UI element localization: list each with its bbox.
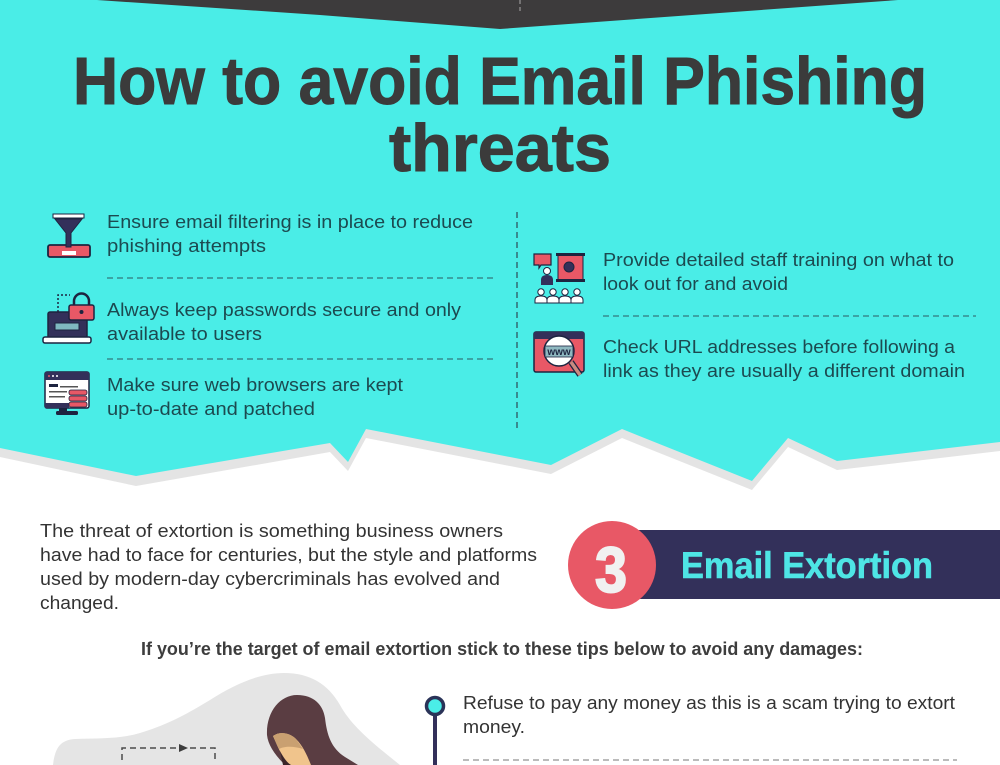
tip text: email filtering — [107, 211, 473, 256]
tip text: staff training — [603, 249, 954, 294]
tip text: URL check: Check URL addresses before following a — [603, 336, 956, 357]
tip text: browsers: Make sure web browsers are kept — [107, 374, 403, 395]
tip timeline: refuse to pay: money. — [463, 716, 525, 737]
icon: staff training — [534, 253, 585, 303]
icon: URL magnifier: www — [546, 347, 571, 358]
tip text: browsers — [107, 374, 403, 419]
section banner: 3 Email Extortion — [568, 521, 1000, 609]
section banner: 3 Email Extortion: Email Extortion — [681, 545, 933, 586]
intro paragraph: The threat of extortion is something business owners — [40, 520, 503, 541]
icon: browser window with code — [45, 372, 89, 415]
tip text: passwords: Always keep passwords secure and only — [107, 299, 462, 320]
icon: laptop with padlock — [43, 294, 94, 343]
title — [73, 44, 927, 186]
intro paragraph: changed. — [40, 592, 119, 613]
top dark header strip — [97, 0, 898, 29]
tip text: URL check: link as they are usually a different domain — [603, 360, 965, 381]
subheading: If you’re the target of email extortion stick to these tips below to avoid any damages: — [141, 639, 863, 659]
tip text: staff training: Provide detailed staff training on what to — [603, 249, 954, 270]
tip text: browsers: up-to-date and patched — [107, 398, 315, 419]
tip text: staff training: look out for and avoid — [603, 273, 788, 294]
tip text: email filtering: phishing attempts — [107, 235, 266, 256]
tip text: passwords: available to users — [107, 323, 262, 344]
tip text: URL check — [603, 336, 965, 381]
panel: cyan tips background with torn edge — [0, 0, 1000, 490]
tip text: passwords — [107, 299, 462, 344]
intro paragraph: used by modern-day cybercriminals has evolved and — [40, 568, 500, 589]
tip text: email filtering: Ensure email filtering is in place to reduce — [107, 211, 473, 232]
title: threats — [389, 111, 611, 186]
intro paragraph: have had to face for centuries, but the style and platforms — [40, 544, 537, 565]
section banner: 3 Email Extortion: 3 — [595, 534, 627, 606]
icon: email filter funnel — [48, 214, 90, 257]
illustration: hooded hacker on grey blob — [53, 673, 400, 765]
tip timeline: refuse to pay: Refuse to pay any money as this is a scam trying to extort — [463, 692, 955, 713]
title: How to avoid Email Phishing — [73, 44, 927, 119]
icon: URL magnifier — [534, 332, 584, 375]
intro paragraph — [40, 520, 537, 613]
tip timeline: refuse to pay — [426, 692, 955, 765]
